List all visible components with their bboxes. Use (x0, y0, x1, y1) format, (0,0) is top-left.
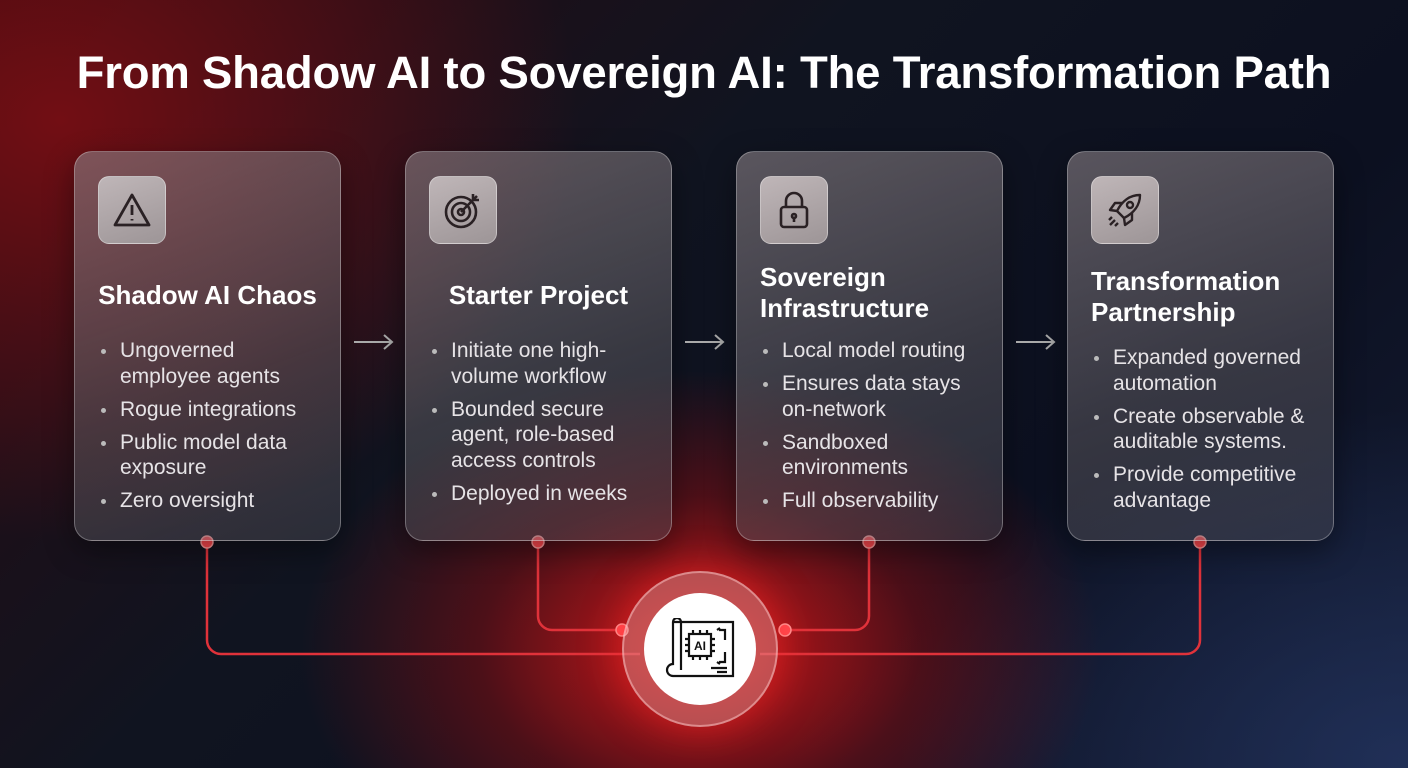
icon: target (429, 176, 497, 244)
card 2: Deployed in weeks (451, 482, 627, 504)
icon: rocket (1091, 176, 1159, 244)
card 1: Ungoverned employee agents (120, 339, 280, 388)
card 3: Full observability (782, 489, 938, 512)
card 3 (736, 151, 1003, 541)
card 3: Ensures data stays on-network (782, 372, 961, 420)
center hub icon (622, 571, 778, 727)
card 4: Provide competitive advantage (1113, 463, 1296, 512)
card 1: Public model data exposure (120, 430, 287, 479)
card 2 (405, 151, 672, 541)
card 2: Starter Project (449, 280, 628, 310)
card 4: Transformation Partnership (1091, 266, 1280, 327)
card 3: Sovereign Infrastructure (760, 262, 929, 323)
card 1 (74, 151, 341, 541)
card 1: Zero oversight (120, 489, 254, 512)
card 1: Shadow AI Chaos (98, 280, 317, 310)
center hub icon: AI (694, 639, 706, 653)
arrow (685, 334, 724, 350)
card 4: Expanded governed automation (1113, 346, 1301, 394)
card 4 (1067, 151, 1334, 541)
card 2: Bounded secure agent, role-based access controls (451, 398, 614, 472)
card 3: Local model routing (782, 339, 965, 362)
icon: lock (760, 176, 828, 244)
arrow (354, 334, 394, 350)
arrow (1016, 334, 1056, 350)
title: From Shadow AI to Sovereign AI: The Transformation Path (77, 47, 1331, 98)
card 1: Rogue integrations (120, 398, 296, 420)
card 4: Create observable & auditable systems. (1113, 404, 1304, 453)
icon: warning (98, 176, 166, 244)
card 3: Sandboxed environments (782, 430, 908, 479)
card 2: Initiate one high-volume workflow (451, 339, 606, 388)
